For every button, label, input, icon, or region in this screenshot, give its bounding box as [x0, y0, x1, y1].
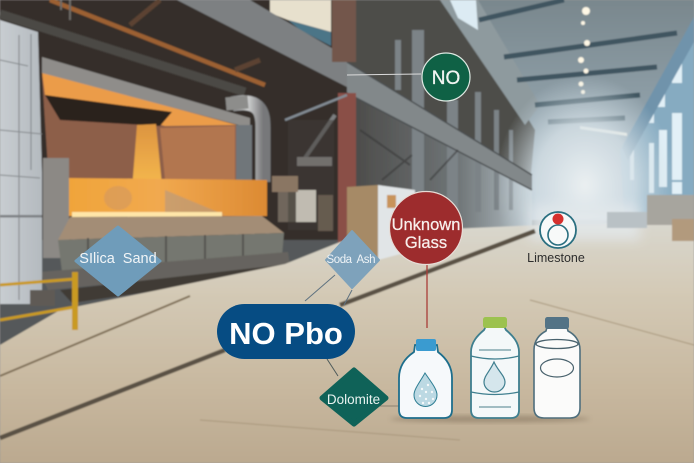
bottle: slate cap with label	[534, 317, 580, 418]
diamond: Silica Sand: SIlica Sand	[79, 251, 157, 267]
pill: NO Pbo	[217, 304, 355, 359]
diamond: Soda Ash: Soda Ash	[326, 254, 376, 266]
diamond: Dolomite: Dolomite	[327, 392, 380, 407]
diamond: Soda Ash	[326, 231, 379, 288]
right hall wall and windows	[620, 17, 694, 228]
pill: NO Pbo: NO Pbo	[229, 316, 343, 351]
icon and label: Limestone: Limestone	[527, 251, 585, 265]
diamond: Silica Sand	[76, 227, 160, 295]
floor	[0, 222, 694, 463]
pipe and beam above furnace	[50, 0, 265, 85]
electrical cabinet	[347, 185, 415, 262]
floor expansion strip	[0, 231, 535, 438]
badge: NO: NO	[432, 68, 460, 89]
silo	[270, 0, 331, 46]
connector lines	[305, 74, 427, 406]
circle: Unknown Glass: Unknown	[392, 216, 460, 234]
icon and label: Limestone	[527, 212, 585, 265]
bottle: green cap with water drop	[471, 317, 519, 418]
bottle: blue cap with speckled drop	[399, 339, 452, 418]
lower hall bracing	[360, 130, 458, 180]
haze	[495, 75, 675, 295]
far-right pallets	[607, 195, 694, 241]
under-beam bay	[347, 80, 532, 240]
badge: NO	[422, 53, 470, 101]
circle: Unknown Glass: Glass	[405, 234, 447, 252]
left hall structure dark background	[0, 0, 347, 240]
ceiling lights	[578, 7, 627, 136]
bottle shadow on floor	[390, 416, 590, 422]
columns	[395, 30, 513, 212]
main steel beam	[177, 0, 347, 87]
furnace	[42, 57, 298, 222]
machinery right of furnace	[272, 120, 334, 231]
yellow safety rail	[0, 272, 75, 330]
red column	[332, 0, 356, 62]
silver control panel	[0, 20, 55, 306]
hopper	[40, 158, 290, 303]
hall ceiling	[340, 0, 694, 220]
circle: Unknown Glass	[390, 192, 462, 264]
diamond: Dolomite	[322, 370, 386, 424]
